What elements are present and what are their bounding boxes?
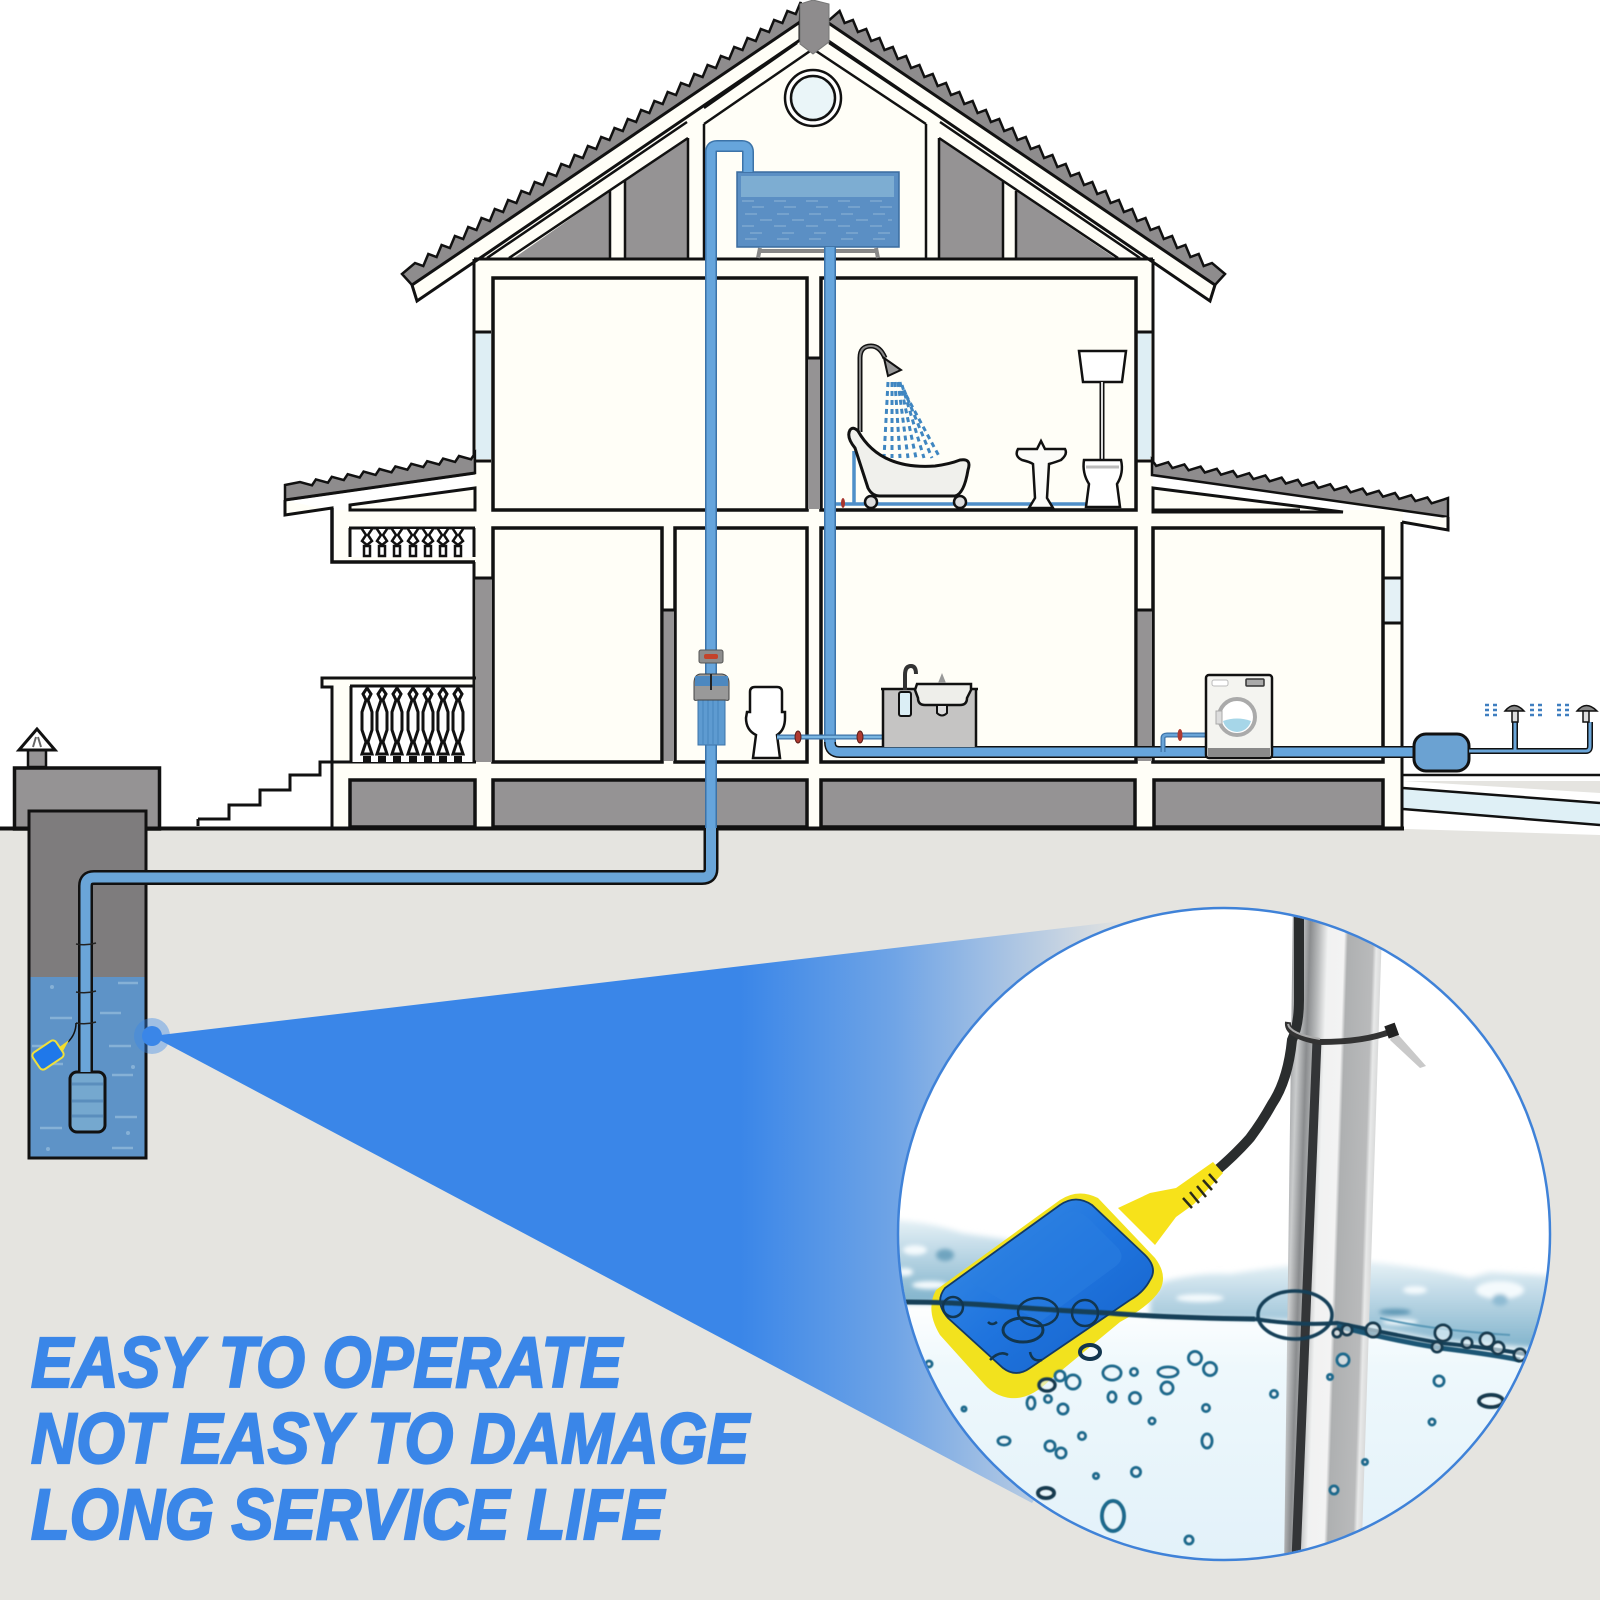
garden path at right <box>1403 775 1600 825</box>
upper side windows <box>475 332 1152 461</box>
upper storey rooms <box>474 259 1153 510</box>
cable tie <box>1288 1022 1426 1068</box>
water spray behind <box>895 1220 1555 1350</box>
cable <box>1215 900 1299 1172</box>
well house <box>14 729 160 829</box>
water filter <box>694 674 729 745</box>
spotlight beam <box>152 921 1224 1503</box>
right side window <box>1384 578 1401 623</box>
lower storey rooms <box>474 528 1383 762</box>
headline text <box>31 1324 751 1555</box>
attic <box>417 30 1211 301</box>
washing machine <box>1163 675 1272 758</box>
right roof <box>1152 460 1448 530</box>
bathtub <box>849 428 969 496</box>
pole <box>1284 900 1383 1570</box>
main roof right <box>827 11 1225 285</box>
bubbles on float <box>943 1297 1100 1360</box>
valve <box>841 498 845 508</box>
line 1: EASY TO OPERATE <box>31 1324 624 1403</box>
line 2: NOT EASY TO DAMAGE <box>31 1400 751 1479</box>
floor line <box>332 760 476 764</box>
location marker dot <box>134 1018 170 1054</box>
ground line <box>0 826 1404 830</box>
submersible pump <box>70 1072 105 1132</box>
shower <box>860 346 940 458</box>
water surface line <box>905 1291 1525 1360</box>
bathroom fixtures <box>836 346 1126 508</box>
pressure gauge <box>699 650 723 663</box>
bathtub feet <box>865 496 966 508</box>
roof water tank <box>737 172 899 258</box>
main roof left <box>402 2 801 285</box>
ground floor toilet <box>746 687 785 758</box>
well water <box>29 811 146 1158</box>
distribution pipe <box>830 247 1415 752</box>
magnified circle photo <box>895 900 1555 1570</box>
house body <box>198 0 1448 829</box>
circle border <box>898 908 1550 1560</box>
water below surface <box>916 1334 1528 1559</box>
wall fill <box>332 259 1403 829</box>
upper balcony <box>332 508 475 562</box>
underground pipe <box>86 828 711 1072</box>
kitchen sink unit <box>881 666 978 747</box>
roof ridge cap <box>800 0 829 54</box>
spray highlights <box>897 1245 1524 1325</box>
ground <box>0 829 1600 1600</box>
pedestal basin <box>1017 441 1066 508</box>
roof fascia <box>412 22 1215 301</box>
small float switch <box>31 1023 76 1071</box>
right outer wall <box>1400 522 1404 829</box>
float top plane <box>970 1212 1122 1322</box>
line 3: LONG SERVICE LIFE <box>31 1476 666 1555</box>
lower balcony <box>322 678 476 829</box>
branch pipe and valves <box>777 692 900 743</box>
basement <box>350 780 1383 827</box>
float yellow shell <box>931 1193 1163 1398</box>
floor supply pipe <box>836 451 1088 504</box>
intake riser pipe <box>711 146 748 875</box>
irrigation sprinklers <box>1469 705 1597 751</box>
left roof <box>285 453 475 515</box>
bubbles in water <box>926 1323 1526 1544</box>
float blue body <box>940 1200 1153 1373</box>
pipe cable ties <box>76 943 96 1024</box>
well <box>14 729 160 1158</box>
pressure tank <box>1414 734 1469 771</box>
stairs <box>198 762 332 826</box>
well shaft <box>29 811 146 1158</box>
yellow strain relief <box>1118 1162 1223 1245</box>
high cistern toilet <box>1079 351 1126 507</box>
round attic window <box>785 70 841 126</box>
